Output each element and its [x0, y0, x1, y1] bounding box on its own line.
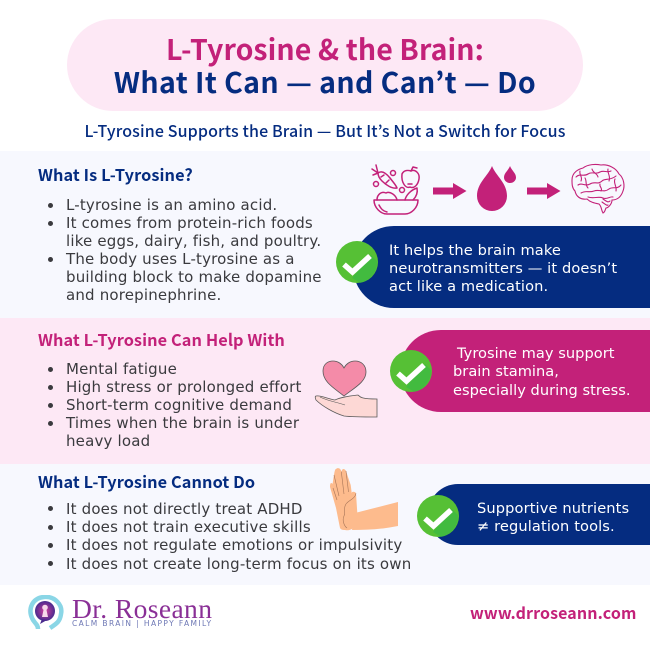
callout text: It helps the brain make [389, 242, 561, 258]
bullet list: building block to make dopamine [66, 268, 322, 286]
bullet list [48, 500, 411, 572]
icon: green check 3 [417, 495, 459, 537]
heading: What L-Tyrosine Cannot Do [38, 469, 255, 493]
bullet list: It does not train executive skills [66, 518, 311, 536]
icon: stop hand [330, 468, 398, 530]
arrow 2 [527, 183, 560, 199]
callout text [453, 345, 631, 398]
callout text: Supportive nutrients [477, 500, 629, 517]
callout text: Tyrosine may support [457, 345, 614, 362]
arrow 1 [433, 183, 466, 199]
title line 1: L-Tyrosine & the Brain: [166, 28, 484, 69]
bullet list [48, 196, 322, 304]
callout text: ≠ regulation tools. [477, 518, 615, 535]
icon: droplets [477, 166, 516, 211]
subtitle: L-Tyrosine Supports the Brain — But It’s Not a Switch for Focus [84, 118, 566, 142]
callout: neurotransmitters [353, 226, 650, 308]
callout: brain stamina [400, 330, 650, 412]
bullet list: Times when the brain is under [66, 414, 299, 432]
bullet list: and norepinephrine. [66, 286, 221, 304]
panel: what is L-tyrosine [0, 151, 650, 318]
bullet list: The body uses L-tyrosine as a [66, 250, 295, 268]
bullet list: It does not create long-term focus on its own [66, 554, 411, 572]
bullet list: Short-term cognitive demand [66, 396, 292, 414]
callout text: especially during stress. [453, 382, 631, 398]
callout text: brain stamina, [453, 363, 559, 380]
icon: heart in hand [314, 360, 378, 418]
icon: food bowl [371, 164, 420, 215]
icon: brain [571, 164, 624, 214]
website: www.drroseann.com [470, 600, 637, 624]
panel: cannot do [0, 464, 650, 585]
logo [28, 593, 213, 630]
bullet list: heavy load [66, 432, 150, 450]
panel: title pill [67, 19, 583, 111]
callout: supportive nutrients [428, 484, 650, 545]
callout text: neurotransmitters — it doesn’t [389, 260, 617, 276]
title line 2: What It Can — and Can’t — Do [114, 61, 536, 102]
bullet list [48, 360, 302, 450]
callout text: act like a medication. [389, 278, 548, 294]
callout text [477, 500, 629, 535]
bullet list: High stress or prolonged effort [66, 378, 302, 396]
brand name: Dr. Roseann [72, 593, 212, 624]
callout text [389, 242, 617, 294]
icon: head logo [28, 595, 64, 630]
bullet list: It does not directly treat ADHD [66, 500, 303, 518]
bullet list: like eggs, dairy, fish, and poultry. [66, 232, 321, 250]
icon: green check 1 [336, 241, 378, 283]
bullet list: It does not regulate emotions or impulsivity [66, 536, 402, 554]
bullet list: It comes from protein-rich foods [66, 214, 313, 232]
bullet list: Mental fatigue [66, 360, 177, 378]
heading: What L-Tyrosine Can Help With [38, 326, 285, 350]
band: section backgrounds [0, 151, 650, 585]
icon: green check 2 [390, 350, 432, 392]
heading: What Is L-Tyrosine? [38, 162, 193, 186]
bullet list: L-tyrosine is an amino acid. [66, 196, 277, 214]
tagline: CALM BRAIN | HAPPY FAMILY [72, 619, 213, 628]
panel: can help with [0, 318, 650, 464]
